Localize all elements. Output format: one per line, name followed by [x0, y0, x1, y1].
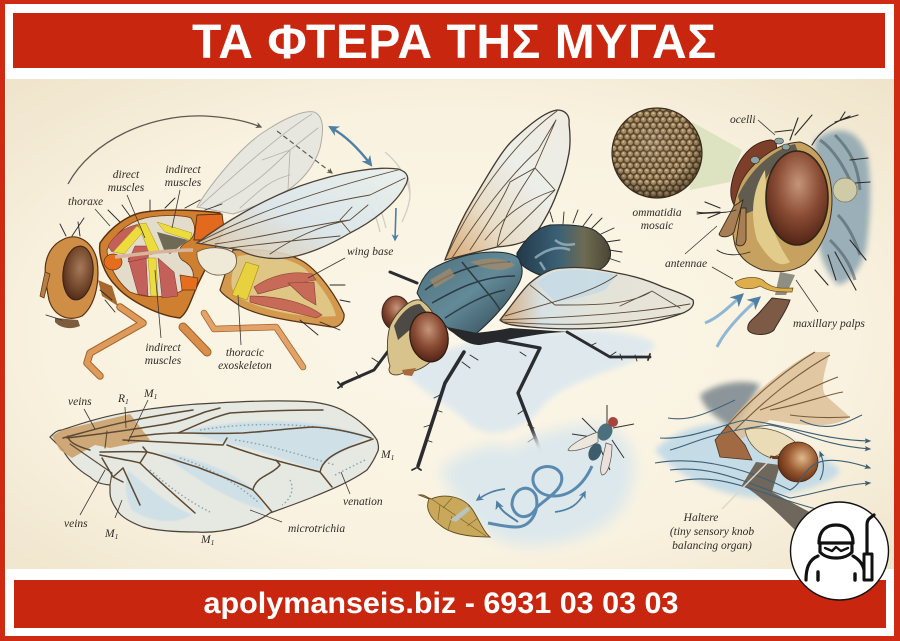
label: M1 right: M	[381, 449, 391, 461]
label: ommatidia mosaic: ommatidia	[632, 207, 682, 219]
abdomen	[220, 250, 344, 327]
thorax copper sheen	[430, 258, 515, 288]
diagram: haltere organ	[655, 352, 870, 552]
abdomen highlights	[535, 240, 575, 270]
head capsule	[732, 142, 832, 272]
illustration background paper	[6, 79, 894, 569]
compound eye	[766, 151, 828, 245]
icon: technician with sprayer	[806, 515, 874, 580]
blue double arrow wing motion	[330, 127, 371, 165]
haltere wing	[723, 352, 850, 440]
label: antennae: antennae	[665, 258, 707, 270]
label: veins top: veins	[68, 396, 92, 408]
magnification cone	[690, 122, 742, 190]
lower wing	[500, 267, 693, 329]
diagram: ommatidia mosaic	[612, 108, 742, 232]
small fly head	[608, 417, 618, 427]
wing veins	[63, 408, 373, 513]
haltere knob	[778, 442, 818, 482]
upper wing veins	[446, 111, 557, 258]
abdomen	[517, 225, 610, 276]
label: M1 top: 1	[154, 392, 157, 401]
label: direct muscles: direct	[113, 169, 139, 181]
label: veins lower left: veins	[64, 518, 88, 530]
upper wing	[445, 110, 570, 260]
label: indirect muscles upper: muscles	[165, 177, 202, 189]
small fly legs	[572, 405, 634, 470]
label: indirect muscles lower: indirect	[145, 342, 181, 354]
mosaic lens	[612, 108, 702, 198]
thorax window	[107, 215, 195, 297]
head compound eye	[60, 245, 96, 301]
thorax	[417, 252, 522, 335]
ghost wing upstroke	[197, 112, 322, 214]
label: M1 right: 1	[391, 453, 394, 462]
fly shadow wash	[405, 330, 654, 433]
thorax shell	[100, 210, 224, 318]
lower wing veins	[500, 275, 690, 324]
wing actuator tube	[115, 250, 193, 257]
haltere wing veins	[725, 352, 850, 430]
leaf	[419, 495, 490, 537]
leader	[722, 458, 772, 509]
back eye	[731, 140, 777, 210]
mouthparts	[55, 318, 80, 328]
title: ΤΑ ΦΤΕΡΑ ΤΗΣ ΜΥΓΑΣ	[192, 16, 716, 69]
wing base	[715, 425, 752, 460]
label: indirect muscles upper: indirect	[165, 164, 201, 176]
wing base tan colour	[52, 414, 150, 458]
thorax muscles red	[108, 224, 178, 298]
front eye	[406, 309, 452, 365]
lower wing blue panel	[537, 270, 617, 302]
blue down arrow	[395, 208, 396, 240]
footer banner	[14, 580, 886, 628]
proboscis tip	[402, 368, 416, 376]
label: M1 bottom: 1	[211, 538, 214, 547]
body underside	[447, 327, 570, 345]
spiral flight path	[488, 466, 592, 527]
antennae segments	[719, 200, 746, 246]
head	[45, 237, 98, 318]
label: M1 bottom: M	[201, 534, 211, 546]
label leaders	[80, 400, 350, 522]
thorax yellow direct muscles	[113, 222, 192, 296]
back eye	[382, 296, 410, 330]
lens shading	[612, 108, 702, 198]
label: maxillary palps: maxillary palps	[793, 318, 865, 330]
leaf veins	[430, 498, 486, 536]
label: R1: 1	[125, 397, 129, 406]
label: thoracic exoskeleton: thoracic	[226, 347, 264, 359]
legs	[338, 272, 650, 470]
frons gray band	[738, 144, 798, 215]
flight path arrow	[68, 116, 261, 184]
diagram: fly anatomy cutaway	[40, 112, 410, 376]
neck	[98, 280, 118, 306]
neck fur blue wash	[814, 130, 870, 285]
abdomen interior	[231, 255, 336, 316]
diagram: detailed fly wing venation	[50, 388, 394, 547]
leaders	[685, 120, 818, 312]
wing base hinge white	[197, 248, 236, 275]
spiral arrow right	[555, 492, 585, 512]
wing blue shading	[126, 421, 368, 521]
thorax hairs	[46, 198, 350, 335]
label: thoracic exoskeleton: exoskeleton	[218, 360, 272, 372]
diagram: maneuver leaf and spiral	[419, 405, 634, 546]
blue wash	[440, 425, 634, 546]
label: M1 top: M	[144, 388, 154, 400]
label: ocelli: ocelli	[730, 114, 756, 126]
antenna	[40, 272, 50, 298]
label: M1 lower left: 1	[115, 532, 118, 541]
haltere stalk	[770, 455, 786, 458]
label: haltere: Haltere	[684, 512, 718, 524]
wing membrane	[50, 401, 378, 532]
abdomen yellow band	[232, 262, 259, 300]
small fly body	[595, 421, 615, 443]
ocelli	[750, 138, 790, 164]
title banner	[13, 13, 885, 69]
blue airflow arrows	[705, 295, 759, 347]
thorax dark cavity	[157, 232, 188, 254]
abdomen muscle bands	[250, 273, 322, 318]
proboscis	[748, 298, 790, 334]
label: indirect muscles lower: muscles	[145, 355, 182, 367]
label: microtrichia: microtrichia	[288, 523, 345, 535]
arista	[697, 210, 750, 255]
logo badge: pest control technician	[790, 502, 888, 600]
small fly	[568, 405, 634, 475]
body dark	[742, 462, 815, 535]
leg hairs	[356, 343, 637, 442]
fore wing	[197, 168, 408, 259]
face yellow	[753, 170, 790, 264]
ghost wing veins	[200, 114, 318, 208]
frons dark band	[394, 304, 428, 340]
orange scutellum	[194, 214, 224, 240]
diagram: fly head closeup	[665, 112, 870, 347]
label: ommatidia mosaic: mosaic	[641, 220, 673, 232]
legs	[87, 307, 303, 376]
fore wing veins	[197, 170, 405, 254]
label: haltere: balancing organ)	[672, 540, 752, 552]
wing stroke dashed arrow	[277, 131, 332, 173]
thorax tuft	[833, 178, 857, 202]
neck	[775, 272, 795, 295]
orange lobes	[104, 254, 198, 290]
label: haltere: (tiny sensory knob	[670, 526, 754, 538]
label: R1: R	[118, 393, 125, 405]
abdomen bristles	[550, 210, 622, 262]
face and frons	[387, 300, 440, 375]
label: M1 lower left: M	[105, 528, 115, 540]
wing motion blur strokes	[362, 152, 410, 232]
footer contact text: apolymanseis.biz - 6931 03 03 03	[204, 587, 678, 620]
fur dark streaks	[820, 135, 860, 280]
leaders	[95, 190, 345, 345]
dark fur	[700, 382, 760, 430]
maxillary palp	[735, 278, 793, 292]
air stream lines	[655, 400, 870, 510]
label: thoraxe: thoraxe	[68, 196, 103, 208]
leaf light mark	[450, 506, 470, 522]
main fly illustration	[338, 110, 693, 470]
label: wing base: wing base	[347, 246, 393, 258]
label: venation: venation	[343, 496, 383, 508]
spiral arrow left	[477, 489, 505, 500]
small fly wings	[568, 432, 598, 451]
blue airflow wash	[655, 423, 840, 498]
hinge plate	[745, 428, 798, 458]
microtrichia stipple	[150, 425, 365, 512]
thorax stripes	[425, 262, 515, 318]
label: direct muscles: muscles	[108, 182, 145, 194]
hair strokes	[697, 112, 870, 290]
spiral arrow up	[497, 502, 518, 522]
